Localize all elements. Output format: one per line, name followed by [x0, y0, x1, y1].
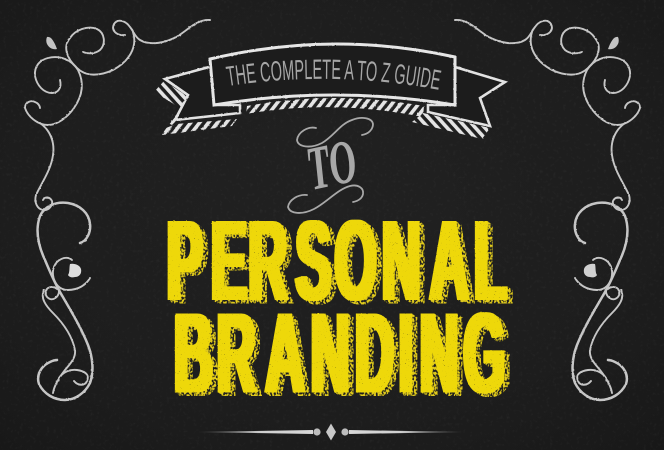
ribbon right tail	[428, 67, 505, 126]
right flower bud ornament	[584, 264, 597, 277]
title line 2: BRANDING	[174, 290, 505, 416]
right teardrop ornament	[608, 37, 619, 49]
left flourish border	[25, 20, 210, 400]
ribbon hatch shadows	[154, 81, 490, 139]
right flourish border	[455, 20, 640, 400]
ribbon main panel	[210, 44, 455, 105]
left teardrop ornament	[46, 37, 57, 49]
flourishes above and below	[288, 118, 373, 213]
connector word "to" with flourishes	[288, 118, 373, 213]
ribbon left tail	[165, 67, 240, 120]
left flower bud ornament	[68, 264, 81, 277]
TO lettering: TO	[301, 126, 363, 204]
ribbon banner	[154, 44, 505, 139]
main title: personal branding	[167, 198, 507, 416]
title line 1: PERSONAL	[167, 198, 507, 324]
bottom divider ornament	[198, 424, 463, 440]
banner heading: THE COMPLETE A TO Z GUIDE	[226, 60, 442, 90]
